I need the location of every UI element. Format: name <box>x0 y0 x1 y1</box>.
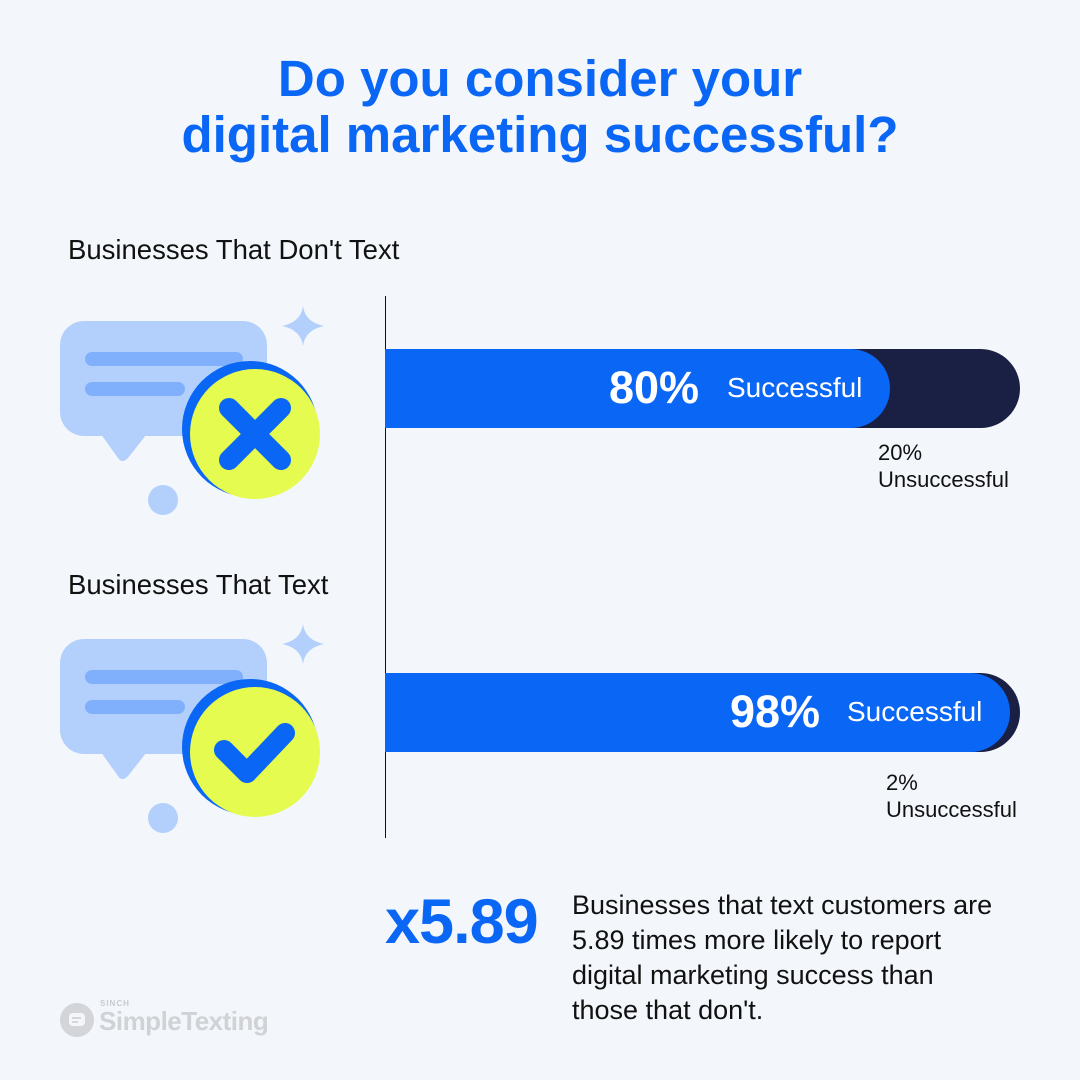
logo <box>60 999 268 1037</box>
label: 20% unsuccessful: Unsuccessful <box>878 467 1009 492</box>
text block: stat description: those that don't. <box>572 995 763 1025</box>
axis line <box>385 296 386 838</box>
stat: x5.89: x5.89 <box>385 887 538 957</box>
text block: stat description: Businesses that text customers are <box>572 890 992 920</box>
title <box>181 50 899 163</box>
bar chart: text: 98% <box>730 686 820 737</box>
bar chart: text <box>385 673 1020 752</box>
bar chart: text: Successful <box>847 696 982 727</box>
label: 2% unsuccessful <box>886 770 1017 822</box>
bar chart: don't text <box>385 349 1020 428</box>
heading: businesses that don't text: Businesses That Don't Text <box>68 234 399 265</box>
text block: stat description <box>572 890 992 1025</box>
title: Do you consider your <box>278 50 802 107</box>
bar chart: don't text: Successful <box>727 372 862 403</box>
label: 20% unsuccessful: 20% <box>878 440 922 465</box>
icon: chat bubble with X <box>60 306 324 515</box>
bar chart: don't text: 80% <box>609 362 699 413</box>
text block: stat description: digital marketing success than <box>572 960 934 990</box>
icon: chat bubble with check <box>60 624 324 833</box>
label: 2% unsuccessful: Unsuccessful <box>886 797 1017 822</box>
logo: SimpleTexting <box>99 1006 268 1036</box>
text block: stat description: 5.89 times more likely to report <box>572 925 941 955</box>
label: 2% unsuccessful: 2% <box>886 770 918 795</box>
title: digital marketing successful? <box>181 106 899 163</box>
heading: businesses that text: Businesses That Text <box>68 569 328 600</box>
logo: SINCH <box>100 999 130 1008</box>
label: 20% unsuccessful <box>878 440 1009 492</box>
